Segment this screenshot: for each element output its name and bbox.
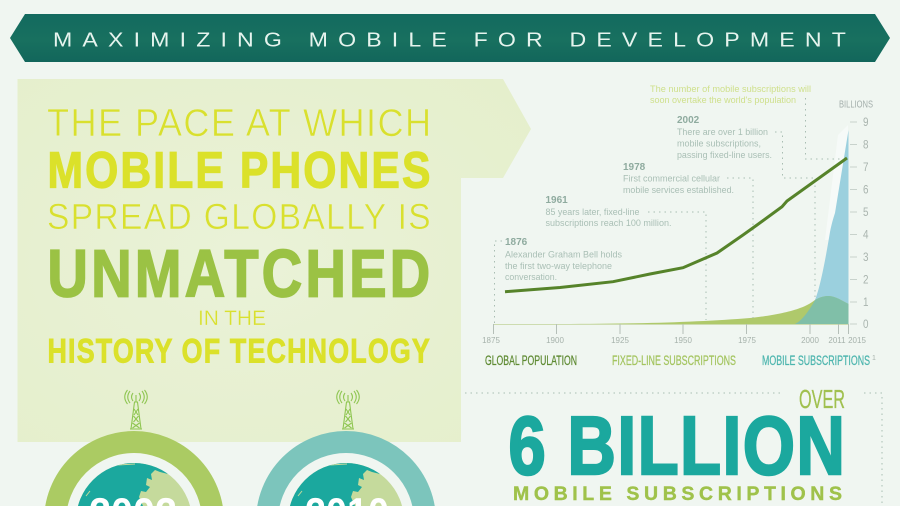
chart legend: GLOBAL POPULATION	[485, 353, 577, 368]
icon: signal tower 2010	[337, 390, 359, 429]
callout: 2002: 2002	[677, 115, 700, 126]
chart area: overlap of mobile and fixed-line	[795, 296, 848, 324]
chart legend: 1	[872, 355, 876, 362]
globe badge 2002	[55, 442, 213, 506]
y axis labels: 5	[863, 207, 868, 219]
headline text block: SPREAD GLOBALLY IS	[47, 196, 432, 237]
x axis labels: 2000	[801, 336, 819, 345]
y axis labels: 2	[863, 274, 868, 286]
callout: 1961: 85 years later, fixed-line	[546, 207, 640, 217]
chart area: mobile subscriptions	[795, 130, 848, 324]
callout: 2002: There are over 1 billion	[677, 127, 768, 137]
statistic: over 6 billion mobile subscriptions: OVER	[799, 384, 845, 414]
x axis labels: 1950	[674, 336, 692, 345]
header banner	[10, 14, 890, 62]
callout: 1876: the first two-way telephone	[505, 261, 612, 271]
chart highlight strip behind mobile area	[825, 125, 848, 240]
callout: 1876	[505, 237, 623, 282]
statistic: over 6 billion mobile subscriptions	[508, 384, 846, 505]
x axis labels: 1900	[546, 336, 564, 345]
y axis labels: 0	[863, 319, 868, 331]
callout: 1876: Alexander Graham Bell holds	[505, 250, 623, 260]
headline text block: HISTORY OF TECHNOLOGY	[48, 332, 431, 370]
headline text block: IN THE	[198, 307, 267, 330]
chart legend	[485, 353, 876, 368]
globe badge 2010	[267, 442, 425, 506]
headline text block: UNMATCHED	[48, 236, 434, 312]
callout: 1876: 1876	[505, 237, 528, 248]
dotted leader lines	[494, 98, 846, 324]
callout: overtake note: soon overtake the world's population	[650, 95, 796, 105]
line and area chart: population and subscriptions	[482, 98, 873, 345]
y axis labels	[863, 117, 869, 331]
callout: 1978: mobile services established.	[623, 185, 734, 195]
y axis unit label: BILLIONS	[839, 100, 873, 110]
y axis labels: 4	[863, 230, 869, 242]
y axis ticks	[850, 122, 857, 324]
x axis labels: 1925	[611, 336, 629, 345]
callout: 2002	[677, 115, 772, 160]
header banner: MAXIMIZING MOBILE FOR DEVELOPMENT	[53, 28, 856, 52]
y axis labels: 1	[863, 297, 868, 309]
x axis labels: 1975	[738, 336, 756, 345]
y axis labels: 8	[863, 140, 868, 152]
x axis labels: 1875	[482, 336, 500, 345]
callout: 1978: First commercial cellular	[623, 174, 720, 184]
callout: 1876: conversation.	[505, 272, 557, 282]
callout: 2002: passing fixed-line users.	[677, 150, 772, 160]
callout: 1978	[623, 162, 734, 195]
x axis	[493, 324, 849, 334]
callout: overtake note: The number of mobile subscriptions will	[650, 84, 811, 94]
callout: 2002: mobile subscriptions,	[677, 138, 761, 148]
x axis labels	[482, 336, 866, 345]
headline text block: THE PACE AT WHICH	[47, 102, 432, 145]
panel: headline arrow background	[18, 79, 531, 442]
y axis labels: 6	[863, 184, 868, 196]
y axis labels: 7	[863, 162, 868, 174]
callout: 1961: subscriptions reach 100 million.	[546, 218, 672, 228]
statistic: over 6 billion mobile subscriptions: MOBILE SUBSCRIPTIONS	[513, 483, 842, 505]
callout: 1961: 1961	[546, 195, 568, 206]
chart area: fixed-line subscriptions	[560, 296, 848, 324]
icon: signal tower 2002	[125, 390, 147, 429]
x axis labels: 2015	[848, 336, 866, 345]
dotted frame around statistic	[465, 393, 882, 506]
callout: 1961	[546, 195, 672, 228]
y axis labels: 9	[863, 117, 868, 129]
chart legend: FIXED-LINE SUBSCRIPTIONS	[612, 353, 736, 368]
y axis labels: 3	[863, 252, 868, 264]
headline text block: MOBILE PHONES	[48, 142, 432, 198]
global population line	[505, 158, 847, 292]
callout: overtake note	[650, 84, 811, 105]
headline text block	[47, 102, 434, 370]
callout: 1978: 1978	[623, 162, 646, 173]
x axis labels: 2011	[828, 336, 846, 345]
